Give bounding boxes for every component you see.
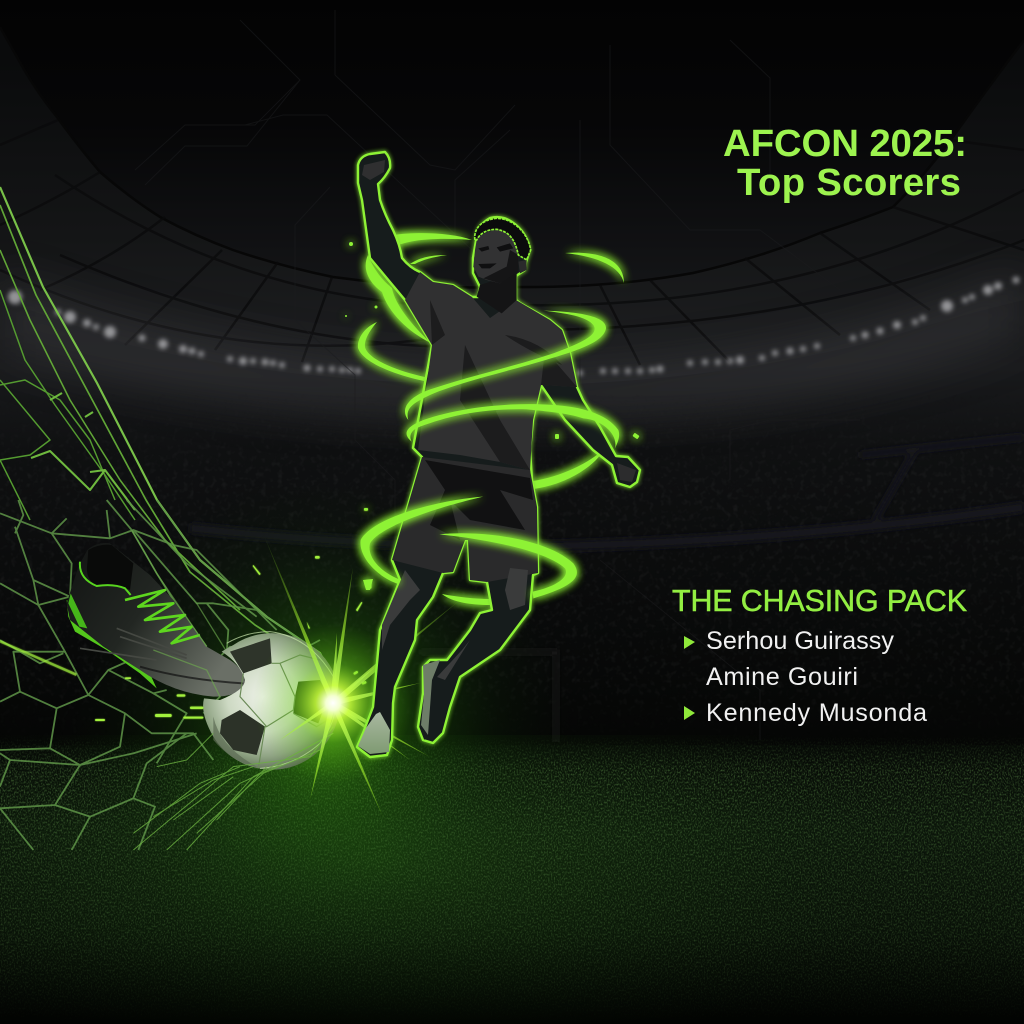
title: Top Scorers: [737, 161, 961, 204]
ribbon sparks: [345, 242, 640, 590]
hair: [475, 218, 531, 260]
green streaks and sparks: [0, 508, 371, 721]
title: [723, 122, 967, 204]
net lower mesh: [0, 500, 337, 850]
grass pitch: [0, 735, 1024, 1024]
flare rays: [263, 533, 460, 817]
tribune bands: [190, 437, 1024, 546]
floodlights: [8, 276, 1020, 376]
net, boot and ball group: [0, 187, 460, 850]
player rear ribbons: [358, 233, 624, 605]
goal frame: [420, 652, 556, 742]
floodlight haze: [0, 270, 1024, 415]
shorts shadows: [425, 460, 533, 540]
boot sole glow: [0, 508, 371, 850]
net fan to ball: [133, 727, 333, 850]
list item: Amine Gouiri: Amine Gouiri: [706, 663, 858, 691]
chest ribbon: [405, 311, 606, 420]
waist ribbon: [407, 404, 619, 448]
soccer ball: [203, 632, 340, 770]
jersey: [405, 272, 577, 470]
face: [473, 230, 518, 283]
rear fist: [617, 463, 636, 482]
list item: Kennedy Musonda: Kennedy Musonda: [706, 699, 928, 727]
circuit lines: [135, 10, 860, 740]
leg shading: [382, 568, 528, 680]
crowd texture: [1, 462, 1008, 686]
player body: [357, 152, 640, 757]
jersey shadows: [430, 300, 577, 470]
boot: [67, 543, 245, 697]
shorts ribbon left: [360, 497, 483, 584]
title: AFCON 2025:: [723, 122, 967, 165]
the chasing pack list: [672, 584, 967, 727]
list item: Serhou Guirassy: Serhou Guirassy: [706, 627, 894, 655]
net strands over boot: [132, 530, 227, 697]
shoes: [358, 712, 390, 754]
fist detail: [362, 160, 385, 180]
stadium background: [0, 10, 1024, 740]
stadium roof: [0, 27, 1024, 385]
ball flare: [253, 623, 413, 783]
player figure: [357, 152, 640, 757]
player front ribbons: [345, 242, 640, 598]
ball green glow: [0, 430, 680, 1024]
list heading: THE CHASING PACK: [672, 584, 967, 618]
face shadow: [483, 250, 518, 283]
head: [473, 218, 531, 313]
boot laces: [125, 590, 200, 643]
net upper strands: [0, 187, 337, 687]
neck: [477, 273, 517, 313]
shorts: [392, 457, 538, 582]
shorts ribbon right: [439, 533, 577, 598]
eyes and mouth: [478, 243, 513, 268]
ear: [518, 260, 527, 273]
